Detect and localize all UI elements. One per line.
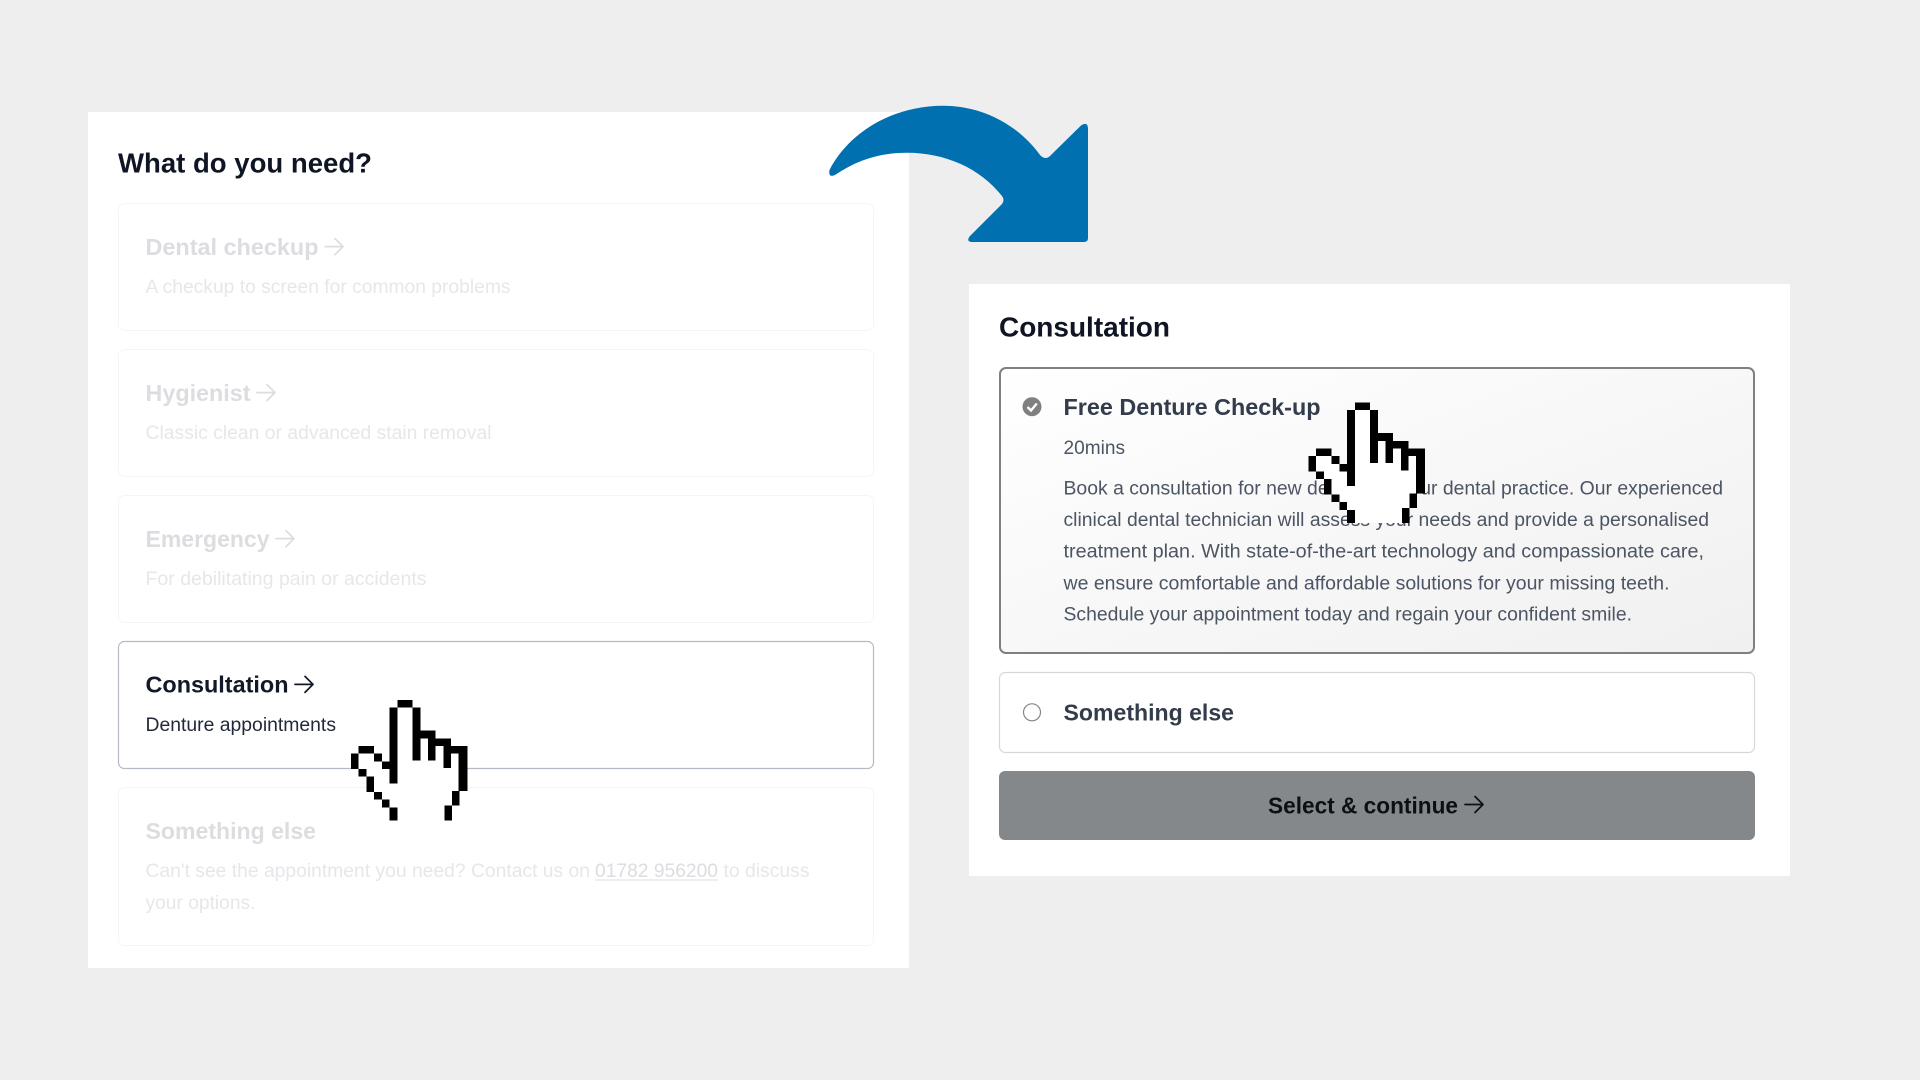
- card: dental checkup: Dental checkup: [146, 234, 318, 260]
- card: something else (faded): your options.: [146, 893, 256, 914]
- arrow: curved blue arrow: [829, 106, 1088, 242]
- card: emergency: Emergency: [146, 526, 270, 552]
- card: something else (faded): [118, 788, 874, 946]
- icon: pixel hand cursor left: [351, 700, 467, 821]
- card: consultation (active): [118, 642, 874, 768]
- option: free denture check-up (selected): treatment plan. With state-of-the-art technology and compassionate care,: [1064, 542, 1704, 562]
- card: consultation (active): Denture appointments: [146, 715, 336, 736]
- option: free denture check-up (selected): Free Denture Check-up: [1064, 394, 1320, 420]
- icon: pixel hand cursor right: [1308, 402, 1425, 523]
- card: something else (faded): to discuss: [724, 861, 810, 882]
- card: emergency: For debilitating pain or accidents: [146, 569, 426, 590]
- option: something else: Something else: [1064, 700, 1234, 726]
- card: consultation (active): Consultation: [146, 672, 288, 698]
- heading: what do you need: What do you need?: [118, 148, 372, 178]
- button: select and continue: [999, 771, 1755, 840]
- option: free denture check-up (selected): we ensure comfortable and affordable solutions for your missing teeth.: [1062, 574, 1670, 594]
- panel: consultation: [969, 284, 1790, 876]
- card: something else (faded): Can't see the appointment you need? Contact us on: [146, 861, 590, 882]
- option: free denture check-up (selected): clinical dental technician will assess your needs and provide a personalised: [1064, 510, 1709, 531]
- icon: selected check: [1022, 397, 1042, 416]
- option: free denture check-up (selected): 20mins: [1064, 438, 1125, 459]
- panel: what do you need: [88, 112, 909, 968]
- card: emergency: [118, 496, 874, 622]
- card: hygienist: Hygienist: [146, 380, 251, 406]
- icon: radio: [1024, 704, 1040, 721]
- option: free denture check-up (selected): [1000, 368, 1754, 653]
- button: select and continue: Select & continue: [1268, 792, 1458, 818]
- option: free denture check-up (selected): Schedule your appointment today and regain your confident smile.: [1064, 604, 1632, 626]
- card: something else (faded): 01782 956200: [595, 861, 718, 882]
- card: hygienist: Classic clean or advanced stain removal: [146, 423, 492, 444]
- card: dental checkup: [118, 204, 874, 330]
- option: free denture check-up (selected): Book a consultation for new dentures at our dental practice. Our experienced: [1064, 478, 1723, 500]
- card: hygienist: [118, 350, 874, 476]
- option: something else: [1000, 672, 1754, 752]
- card: something else (faded): Something else: [146, 818, 316, 844]
- card: dental checkup: A checkup to screen for common problems: [146, 277, 510, 298]
- heading: consultation: Consultation: [999, 312, 1170, 342]
